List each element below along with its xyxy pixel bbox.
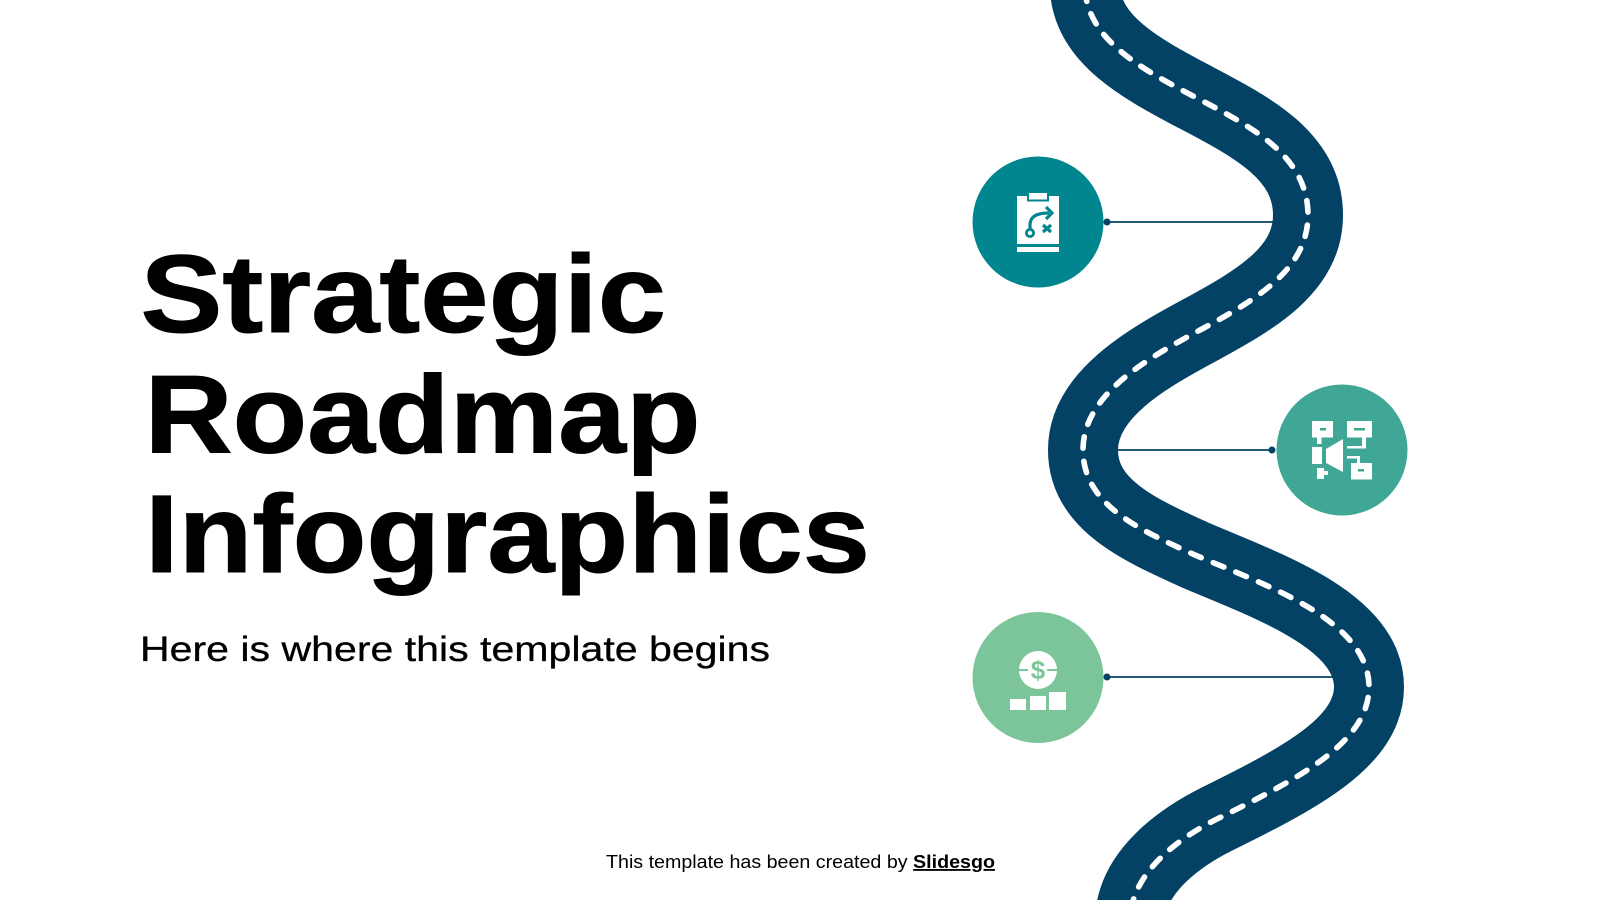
- step 1: strategy clipboard: [972, 156, 1104, 288]
- connector 2: [1117, 446, 1276, 454]
- road centre dashes: [1083, 0, 1369, 900]
- circle 3: [972, 612, 1104, 743]
- winding road: [1083, 0, 1369, 900]
- footer credit: This template has been created by Slidesgo: [606, 851, 995, 872]
- step 2: marketing flow: [1276, 384, 1408, 516]
- connector 3: [1104, 674, 1336, 680]
- title: Roadmap: [144, 354, 700, 476]
- title: Strategic: [140, 233, 666, 356]
- circle 2: [1276, 384, 1408, 516]
- circle 1: [972, 156, 1104, 288]
- icon: megaphone flowchart: [1312, 421, 1372, 480]
- icon: dollar coin and rising bars: $: [1031, 655, 1046, 685]
- connector 1: [1104, 218, 1275, 226]
- subtitle: Here is where this template begins: [140, 630, 770, 669]
- title: [140, 233, 870, 596]
- icon: clipboard with route: [1017, 193, 1059, 252]
- connector lines: [1104, 218, 1336, 680]
- road surface: [1083, 0, 1369, 900]
- title: Infographics: [145, 473, 870, 596]
- step 3: budget: [972, 612, 1104, 743]
